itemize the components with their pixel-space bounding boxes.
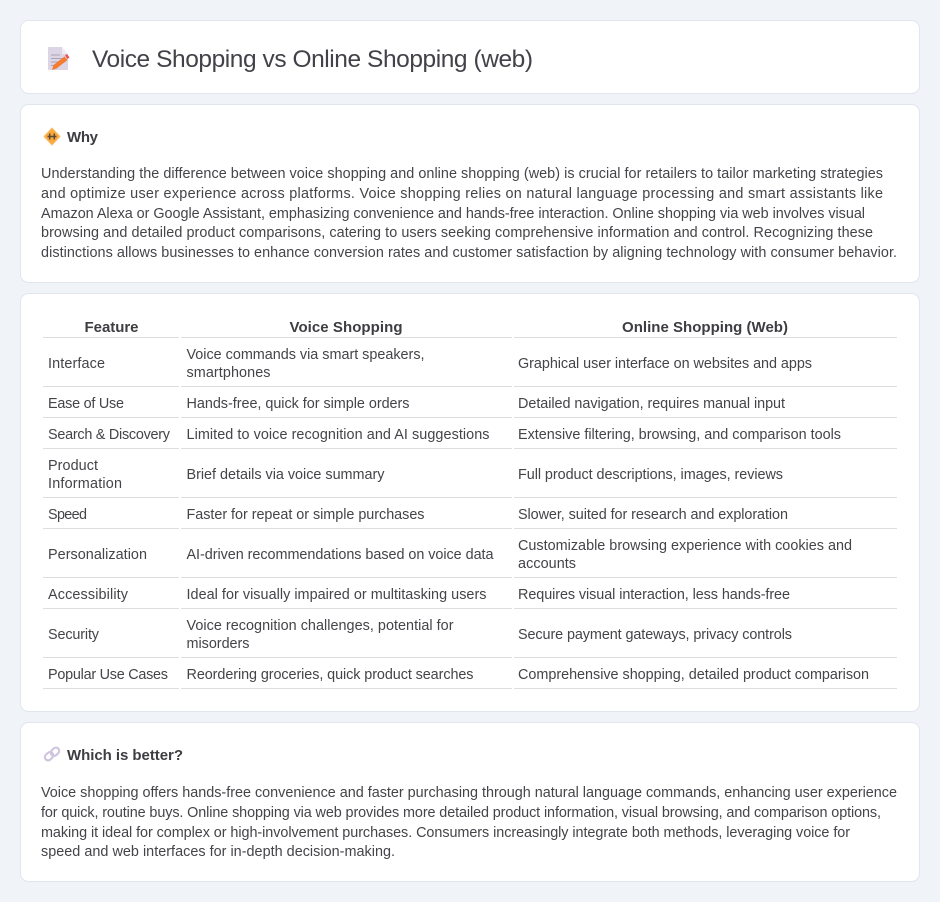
row: security (48, 618, 792, 652)
row: security: Voice recognition challenges, potential for (186, 618, 454, 634)
row: ease of use: Hands-free, quick for simple orders (186, 396, 410, 412)
row: personalization: Personalization (48, 547, 147, 563)
row: speed: Slower, suited for research and exploration (518, 507, 788, 523)
table rules (43, 337, 897, 689)
heading: why: Why (67, 129, 99, 146)
text block: which is better paragraph (41, 785, 897, 860)
row: search and discovery: Search & Discovery (48, 427, 171, 443)
row: accessibility: Requires visual interaction, less hands-free (518, 587, 790, 603)
row: interface: Interface (48, 356, 105, 372)
row: personalization (48, 538, 852, 572)
row: product information: Full product descriptions, images, reviews (518, 467, 783, 483)
text block: which is better paragraph: for quick, routine buys. Online shopping via web provides more detailed product information, visual browsing, and comparison options, (41, 805, 881, 821)
table header: Feature (84, 319, 138, 336)
row: personalization: Customizable browsing experience with cookies and (518, 538, 852, 554)
row: security: misorders (186, 636, 250, 652)
text block: why paragraph (41, 166, 897, 261)
text block: why paragraph: and optimize user experience across platforms. Voice shopping relies on natural language processing and smart assistants like (41, 186, 883, 202)
row: accessibility (48, 587, 790, 603)
row: search and discovery (48, 427, 841, 443)
panel: why (20, 104, 920, 282)
text block: which is better paragraph: Voice shopping offers hands-free convenience and faster purchasing through natural language commands, enhancing user experience (41, 785, 897, 801)
row: product information: Information (48, 476, 122, 492)
row: interface: smartphones (186, 365, 270, 381)
table header (84, 319, 788, 336)
icon: link (44, 746, 61, 762)
row: accessibility: Ideal for visually impaired or multitasking users (186, 587, 486, 603)
icon: document with pencil (48, 47, 70, 70)
row: personalization: AI-driven recommendations based on voice data (186, 547, 494, 563)
panel: header (20, 20, 920, 94)
title: Voice Shopping vs Online Shopping (web) (92, 46, 533, 73)
text block: why paragraph: browsing and detailed product comparisons, catering to users seeking comprehensive information and control. Recognizing these (41, 225, 873, 241)
row: security: Secure payment gateways, privacy controls (518, 627, 792, 643)
row: interface (48, 347, 812, 381)
row: search and discovery: Limited to voice recognition and AI suggestions (186, 427, 490, 443)
heading: which is better: Which is better? (67, 747, 183, 764)
table header: Online Shopping (Web) (622, 319, 788, 336)
row: security: Security (48, 627, 100, 643)
text block: which is better paragraph: speed and web interfaces for in-depth decision-making. (41, 844, 395, 860)
text block: why paragraph: Amazon Alexa or Google Assistant, emphasizing convenience and hands-free interaction. Online shopping via web involves visual (41, 206, 865, 222)
row: popular use cases: Popular Use Cases (48, 667, 168, 683)
text block: why paragraph: distinctions allows businesses to enhance conversion rates and customer satisfaction by aligning technology with consumer behavior. (41, 245, 897, 261)
row: search and discovery: Extensive filtering, browsing, and comparison tools (518, 427, 841, 443)
row: product information: Brief details via voice summary (186, 467, 385, 483)
row: ease of use: Ease of Use (48, 396, 124, 412)
panel: which is better (20, 722, 920, 882)
row: ease of use (48, 396, 785, 412)
row: product information (48, 458, 783, 492)
row: popular use cases (48, 667, 869, 683)
text block: why paragraph: Understanding the difference between voice shopping and online shopping (web) is crucial for retailers to tailor marketing strategies (41, 166, 883, 182)
row: ease of use: Detailed navigation, requires manual input (518, 396, 785, 412)
text block: which is better paragraph: making it ideal for complex or high-involvement purchases. Consumers increasingly integrate both methods, leveraging voice for (41, 825, 850, 841)
table header: Voice Shopping (290, 319, 402, 336)
row: product information: Product (48, 458, 98, 474)
row: speed: Faster for repeat or simple purchases (186, 507, 424, 523)
panel: comparison table (20, 294, 920, 712)
row: interface: Graphical user interface on websites and apps (518, 356, 812, 372)
row: accessibility: Accessibility (48, 587, 129, 603)
row: popular use cases: Comprehensive shopping, detailed product comparison (518, 667, 869, 683)
row: speed (48, 507, 788, 523)
row: personalization: accounts (518, 556, 576, 572)
row: interface: Voice commands via smart speakers, (186, 347, 424, 363)
row: popular use cases: Reordering groceries, quick product searches (186, 667, 474, 683)
row: speed: Speed (48, 507, 87, 523)
icon: orange diamond sign (44, 128, 60, 145)
